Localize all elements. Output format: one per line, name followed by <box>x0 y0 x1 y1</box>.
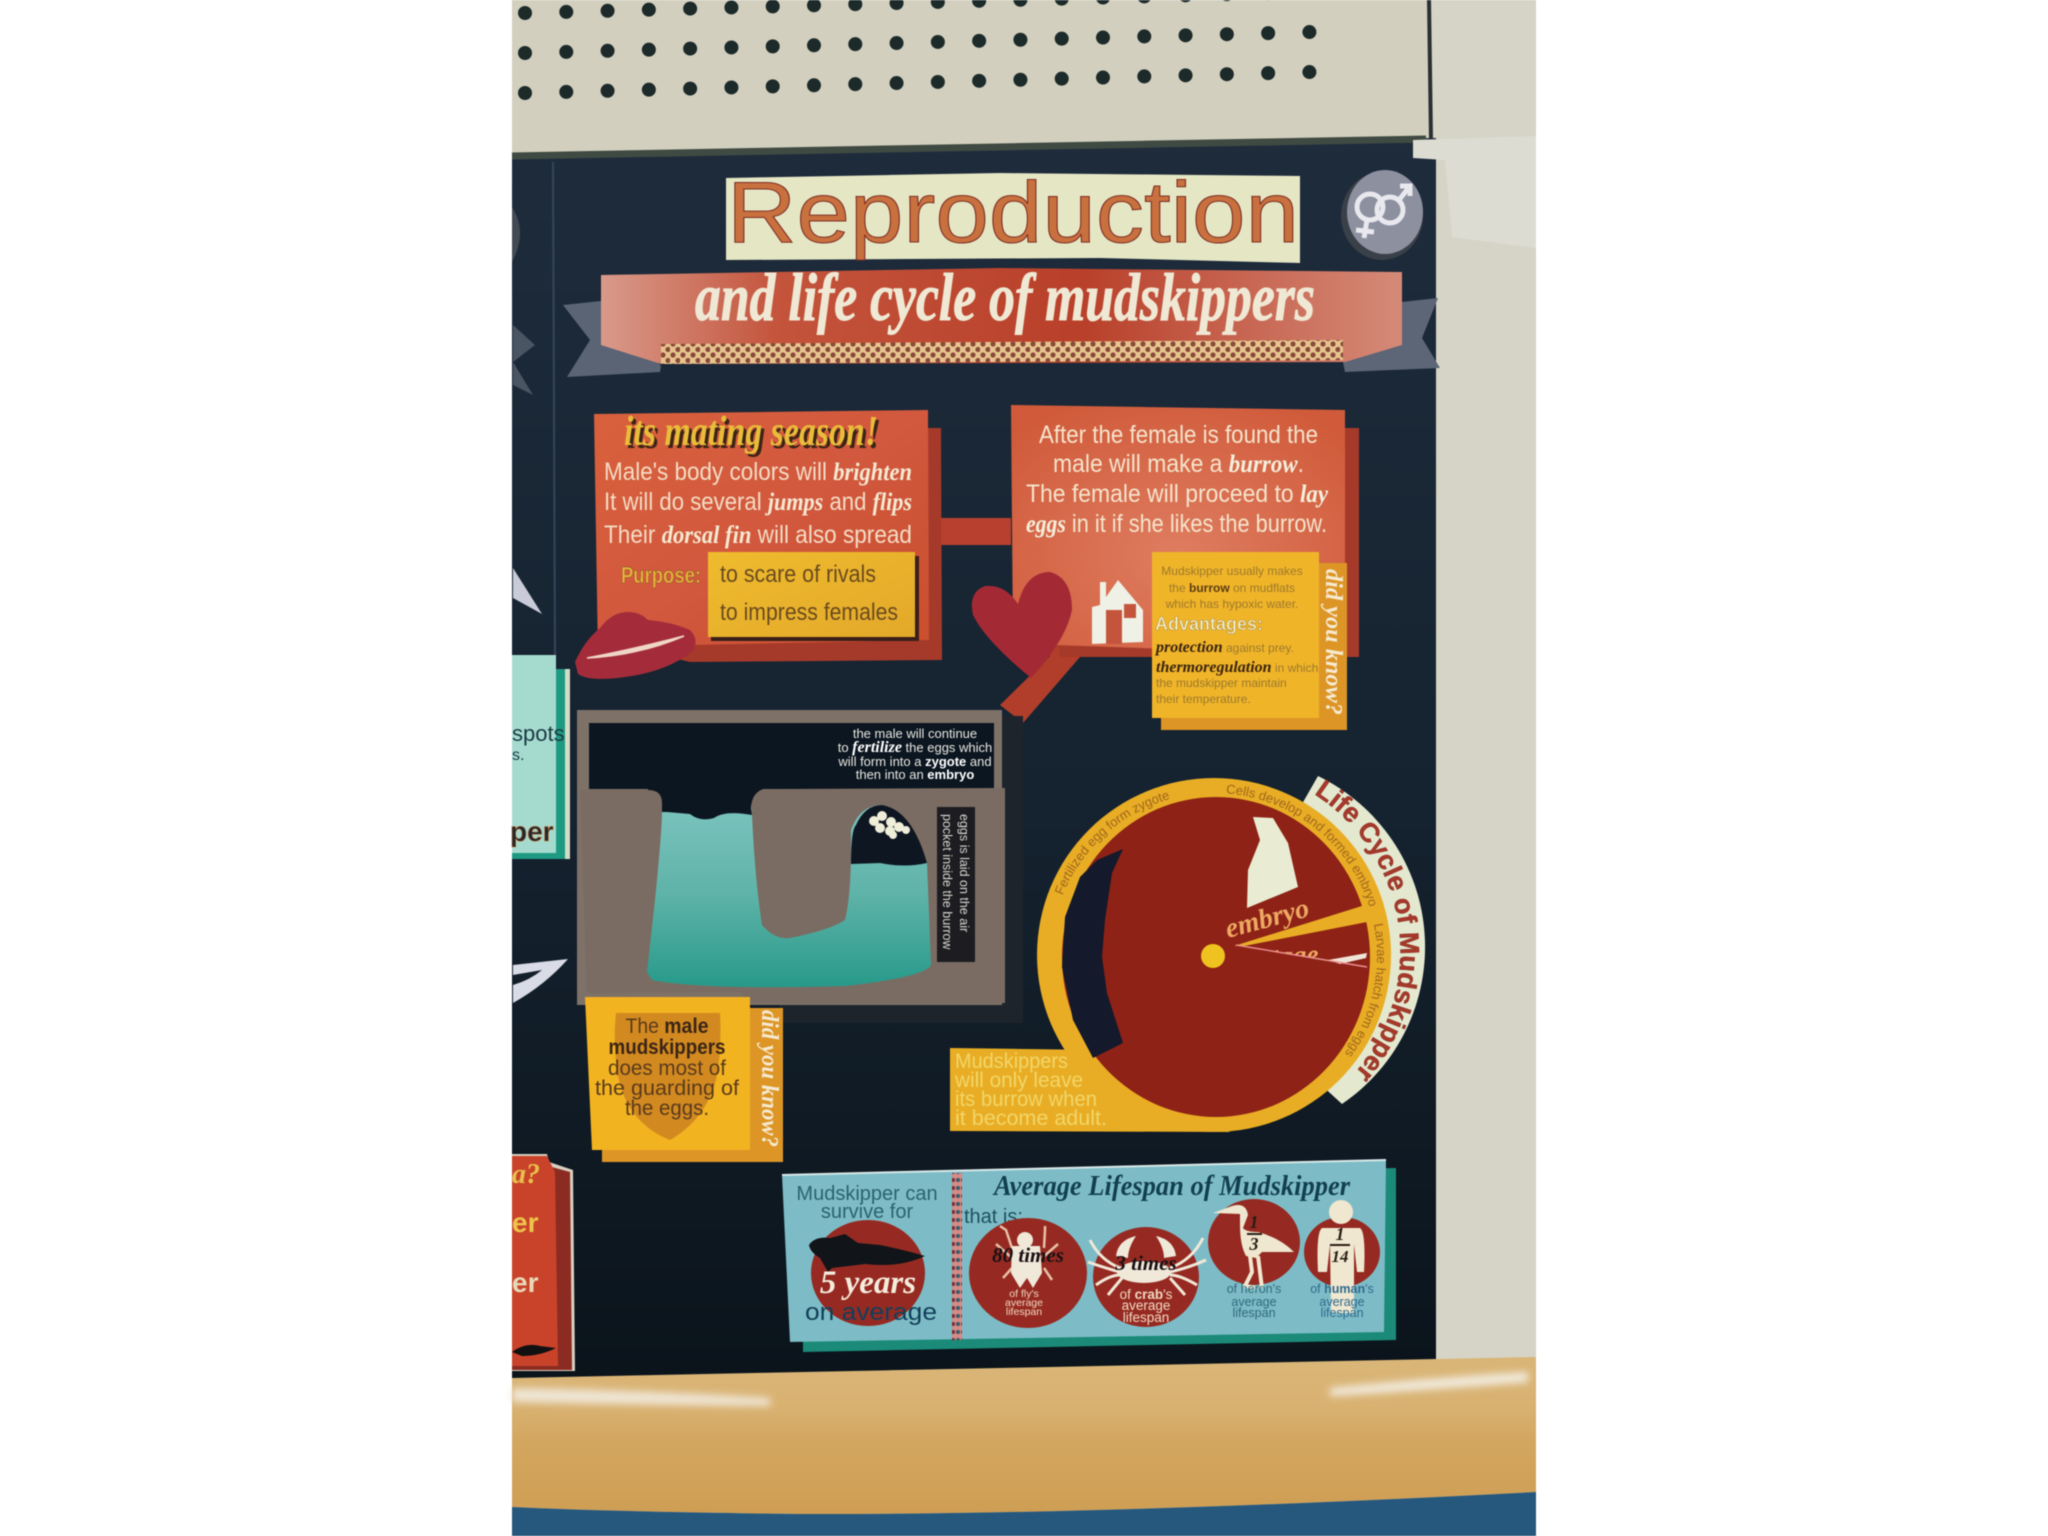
text: fertilize <box>837 726 992 782</box>
connector bar between panels <box>941 518 1011 545</box>
callout: did you know burrow facts <box>1152 552 1347 730</box>
body text: It will do several jumps and flips <box>604 488 912 516</box>
life cycle wheel <box>949 776 1426 1133</box>
red cropped panel: a? <box>512 1159 540 1190</box>
callout: did you know burrow facts: the mudskipper maintain <box>1156 676 1287 690</box>
ribbon body <box>601 268 1402 364</box>
text: fertilize: to fertilize the eggs which <box>838 739 992 756</box>
fly comparison: 80 times <box>992 1243 1064 1267</box>
teal cropped panel: per <box>510 816 554 847</box>
white spike lower <box>513 959 568 1003</box>
heron comparison: of heron's <box>1227 1282 1281 1296</box>
crab comparison: of crab's <box>1120 1287 1173 1302</box>
purpose box <box>708 552 919 641</box>
heron comparison <box>1208 1199 1300 1320</box>
callout: did you know burrow facts: thermoregulation in which <box>1156 659 1318 676</box>
connector: diagonal to burrow box <box>1000 645 1152 723</box>
crab comparison: lifespan <box>1123 1310 1169 1325</box>
callout: male guards eggs: mudskippers <box>608 1036 726 1059</box>
subtitle: and life cycle of mudskippers <box>695 259 1315 335</box>
teal cropped panel: s. <box>512 747 524 764</box>
title: Reproduction: Reproduction <box>727 165 1299 261</box>
ring text: Larvae hatch from eggs <box>1345 923 1386 1057</box>
ring text <box>1054 784 1386 1057</box>
that is: that is: <box>964 1206 1023 1228</box>
spike top <box>513 568 542 614</box>
text: fertilize: then into an embryo <box>856 767 974 782</box>
small text: the burrow on mudflats <box>1169 581 1295 595</box>
icon: house <box>1092 580 1143 644</box>
icon: crab <box>1088 1236 1206 1295</box>
label tag: air pocket <box>937 807 975 962</box>
left edge cropped panels <box>510 207 575 1371</box>
callout text: adult: its burrow when <box>955 1088 1097 1111</box>
dark air gap <box>648 788 768 819</box>
teal cropped panel <box>510 655 570 859</box>
human comparison: lifespan <box>1320 1306 1364 1320</box>
heading: its mating season! <box>627 412 881 458</box>
air pocket <box>851 805 927 866</box>
body text: male will make a burrow. <box>1053 450 1304 478</box>
fly comparison <box>969 1218 1087 1328</box>
heron comparison: lifespan <box>1232 1306 1276 1320</box>
dotted strip <box>661 340 1343 364</box>
label tag: air pocket: pocket inside the burrow <box>940 814 954 950</box>
icon: lips <box>575 612 696 679</box>
body text: After the female is found the <box>1039 421 1318 449</box>
callout text: adult: Mudskippers <box>955 1050 1068 1073</box>
fly comparison: of fly's <box>1009 1288 1039 1300</box>
body text <box>1026 421 1329 538</box>
callout text: adult: it become adult. <box>955 1107 1107 1130</box>
heading: its mating season! <box>624 409 878 455</box>
white sliver <box>1328 953 1367 964</box>
centre pin <box>1201 944 1225 968</box>
purpose box: to impress females <box>720 599 898 626</box>
callout: male guards eggs: the guarding of <box>595 1077 739 1100</box>
small text: Mudskipper usually makes <box>1161 564 1303 578</box>
pegboard panel <box>512 0 1431 160</box>
dark notch window <box>1062 849 1123 1058</box>
rotated label: did you know? <box>1320 569 1346 715</box>
survival text: survive for <box>821 1201 913 1223</box>
purpose box: to scare of rivals <box>720 561 876 588</box>
crab comparison <box>1088 1227 1206 1327</box>
banner ribbon <box>563 259 1440 377</box>
icon: shield <box>615 1013 720 1140</box>
icon: heart <box>972 572 1072 678</box>
teal cropped panel: spots <box>512 721 565 746</box>
ring text: Fertilized egg form zygote <box>1054 792 1170 895</box>
small text: which has hypoxic water. <box>1165 597 1298 611</box>
heron comparison: 3 <box>1248 1234 1258 1254</box>
dark poster board <box>512 138 1436 1380</box>
spike upper <box>513 325 535 395</box>
circle: 5 years <box>805 1220 937 1326</box>
wooden ledge <box>512 1357 1536 1514</box>
survival text: Mudskipper can <box>796 1183 938 1205</box>
round badge edge <box>512 207 520 262</box>
callout: did you know burrow facts: Advantages: <box>1155 614 1263 634</box>
human comparison: 14 <box>1332 1247 1348 1266</box>
yellow pointer <box>1234 905 1372 946</box>
callout: did you know burrow facts: their temperature. <box>1156 692 1251 706</box>
fly comparison: average <box>1005 1297 1043 1309</box>
callout: male guards eggs: The male <box>626 1015 708 1038</box>
small text <box>1161 564 1303 611</box>
purpose label: Purpose: <box>621 562 701 588</box>
human comparison: 1 <box>1336 1224 1344 1244</box>
icon: mudskipper fish <box>809 1234 925 1272</box>
heron comparison: average <box>1231 1295 1277 1309</box>
icon: heron <box>1213 1205 1294 1288</box>
red disc <box>1062 797 1370 1117</box>
panel: burrow <box>972 405 1359 678</box>
white fish cutout <box>1247 817 1298 908</box>
ribbon tail left <box>563 301 661 377</box>
masking tape <box>1413 136 1536 248</box>
heron comparison: 1 <box>1250 1212 1258 1232</box>
body text <box>604 458 912 549</box>
callout: male guards eggs <box>585 997 783 1162</box>
pocket paper <box>580 788 1005 1003</box>
callout: male guards eggs: does most of <box>608 1057 726 1080</box>
red cropped panel <box>512 1154 575 1371</box>
circle: 5 years: 5 years <box>820 1265 916 1301</box>
human comparison: average <box>1319 1295 1365 1309</box>
icon: gender symbol badge <box>1341 170 1423 260</box>
callout text: adult <box>954 1050 1107 1130</box>
icon: fly <box>996 1226 1058 1288</box>
ribbon tail right <box>1343 298 1440 372</box>
label tag: air pocket: eggs is laid on the air <box>957 814 971 932</box>
callout: male guards eggs: did you know? <box>756 1010 782 1147</box>
panel: eggs in burrow diagram <box>577 710 1023 1023</box>
blue floor strip <box>512 1492 1536 1536</box>
arc paper with title: Life Cycle of Mudskipper <box>1314 779 1420 1083</box>
callout: did you know burrow facts: protection against prey. <box>1154 639 1294 656</box>
panel: average lifespan <box>782 1160 1396 1352</box>
human comparison <box>1304 1200 1380 1320</box>
human comparison: of human's <box>1310 1282 1374 1296</box>
text: fertilize: the male will continue <box>853 726 977 741</box>
callout text: adult: will only leave <box>954 1069 1083 1092</box>
heading: Average Lifespan of Mudskipper <box>992 1170 1351 1202</box>
callout: male guards eggs: the eggs. <box>625 1097 709 1120</box>
fly comparison: lifespan <box>1006 1306 1042 1318</box>
ring text: Cells develop and formed embryo <box>1226 784 1376 906</box>
text: fertilize: will form into a zygote and <box>837 754 992 769</box>
water cutout <box>647 800 931 987</box>
crab comparison: 3 times <box>1114 1251 1177 1275</box>
red cropped panel: er <box>512 1267 539 1298</box>
circle: 5 years: on average <box>805 1299 937 1326</box>
outer yellow disc <box>1037 778 1391 1132</box>
body text: Their dorsal fin will also spread <box>604 521 912 549</box>
body text: The female will proceed to lay <box>1026 480 1329 508</box>
dotted divider <box>952 1173 962 1340</box>
body text: Male's body colors will brighten <box>604 458 912 486</box>
callout strip <box>950 1048 1230 1132</box>
crab comparison: average <box>1122 1298 1170 1313</box>
red cropped panel: er <box>512 1207 539 1238</box>
panel: mating season <box>575 409 942 679</box>
survival text <box>796 1183 938 1223</box>
eggs <box>869 811 910 839</box>
body text: eggs in it if she likes the burrow. <box>1026 510 1327 538</box>
icon: human <box>1318 1200 1364 1313</box>
embryo label: embryo <box>1222 893 1312 945</box>
background photo: wall and board <box>512 0 1536 1536</box>
stage label: stage <box>1260 939 1319 972</box>
